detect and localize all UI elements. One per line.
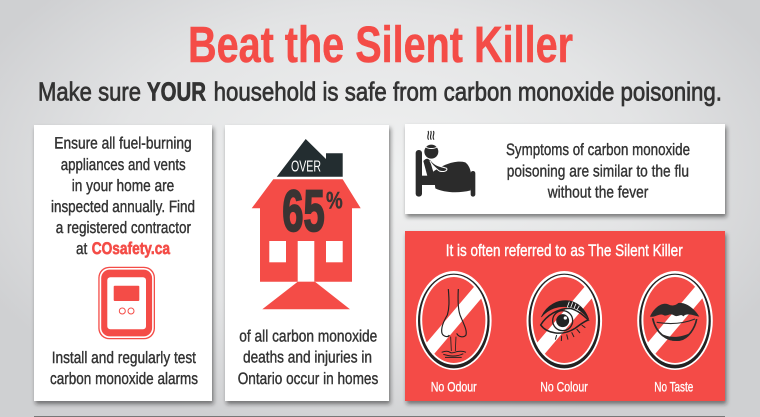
text block: inspection advice: Ensure all fuel-burning <box>54 134 192 152</box>
text block: symptoms: Symptoms of carbon monoxide <box>506 141 690 159</box>
icon: no taste <box>637 271 713 370</box>
text block: inspection advice: at <box>76 240 88 258</box>
caption: no odour: No Odour <box>431 379 477 395</box>
panel: 65 percent statistic <box>225 125 389 401</box>
icon: no colour <box>526 271 602 370</box>
text block: inspection advice <box>51 134 195 258</box>
icon: house with statistic: % <box>326 188 343 214</box>
panel: inspection and alarms <box>34 125 212 401</box>
icon: house with statistic: OVER <box>291 158 321 176</box>
text block: symptoms: without the fever <box>547 183 649 201</box>
text block: symptoms <box>506 141 690 201</box>
panel: symptoms <box>405 124 725 214</box>
icon: no odour <box>416 271 492 370</box>
text block: statistic caption <box>238 328 378 388</box>
text block: statistic caption: of all carbon monoxide <box>239 328 377 346</box>
text block: alarm advice <box>50 349 198 388</box>
subtitle: Make sure <box>38 76 141 106</box>
heading: silent killer: It is often referred to as The Silent Killer <box>446 242 683 260</box>
icon: house with statistic: 65 <box>282 179 325 244</box>
text block: inspection advice: in your home are <box>72 177 174 195</box>
text block: inspection advice: appliances and vents <box>61 156 186 174</box>
caption: no taste: No Taste <box>654 379 693 395</box>
panel: the silent killer <box>405 231 725 401</box>
text block: inspection advice: a registered contractor <box>56 219 191 237</box>
text block: statistic caption: Ontario occur in homes <box>238 370 378 388</box>
icon: sick person in bed <box>416 131 475 197</box>
text block: inspection advice: inspected annually. Find <box>51 198 195 216</box>
title: Beat the Silent Killer <box>188 16 573 73</box>
text block: alarm advice: carbon monoxide alarms <box>50 370 198 388</box>
icon: house with statistic <box>252 139 361 309</box>
subtitle: YOUR <box>147 76 206 106</box>
text block: alarm advice: Install and regularly test <box>52 349 196 367</box>
text block: statistic caption: deaths and injuries in <box>243 349 372 367</box>
text block: inspection advice: COsafety.ca <box>92 239 170 258</box>
text block: symptoms: poisoning are similar to the flu <box>507 163 689 181</box>
icon: carbon monoxide alarm <box>98 267 155 339</box>
caption: no colour: No Colour <box>540 379 588 395</box>
